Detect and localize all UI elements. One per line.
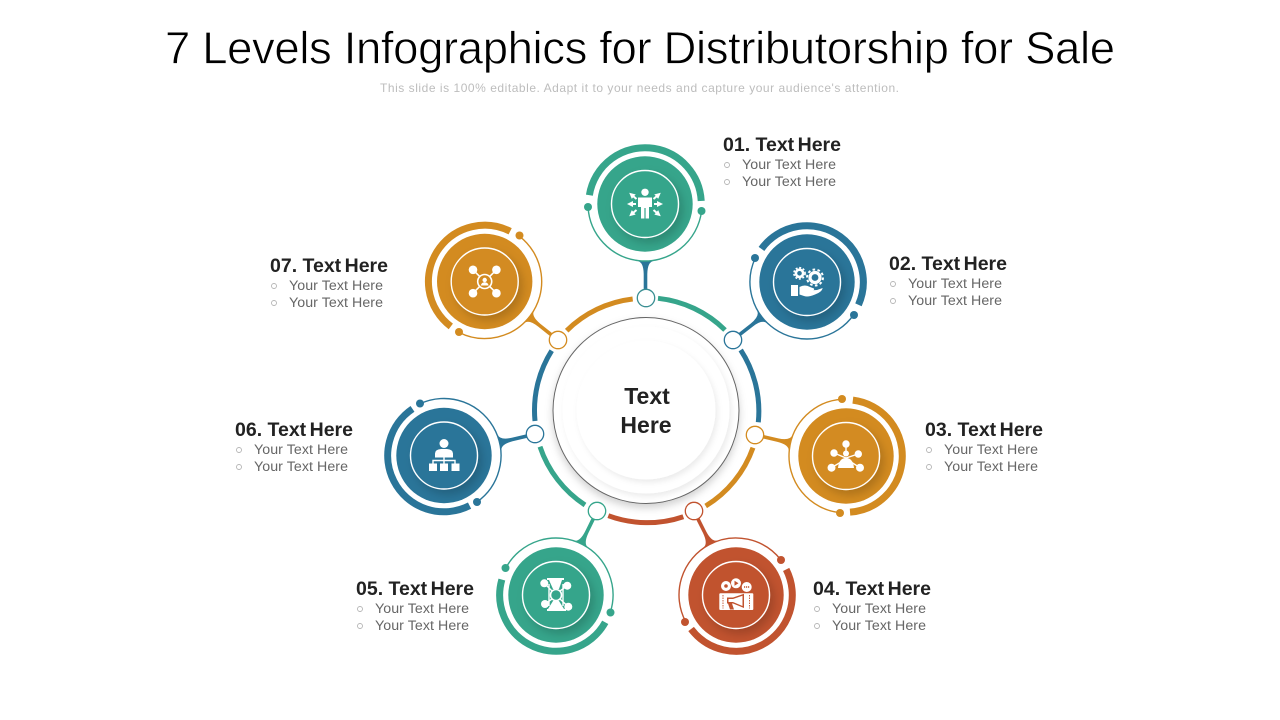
disk 04: [688, 547, 784, 643]
icon: hourglass network: [540, 578, 572, 611]
disk 07: [437, 234, 532, 329]
text block 07: 07. Text Here: [270, 255, 388, 277]
text block 07: Your Text Here: [289, 295, 383, 311]
node 04: [685, 502, 703, 520]
text block 03: Your Text Here: [944, 459, 1038, 475]
text block 07: [270, 255, 388, 311]
text block 01: 01. Text Here: [723, 134, 841, 156]
text block 02: [889, 253, 1007, 309]
disk 06: [396, 408, 492, 503]
text block 04: [813, 578, 931, 634]
node 07: [549, 331, 567, 349]
subtitle: This slide is 100% editable. Adapt it to your needs and capture your audience's attention.: [380, 81, 899, 95]
connector 03: [759, 428, 792, 451]
text block 06: 06. Text Here: [235, 419, 353, 441]
text block 02: Your Text Here: [908, 293, 1002, 309]
node 03: [746, 426, 764, 444]
connector 02: [733, 311, 767, 342]
text block 03: 03. Text Here: [925, 419, 1043, 441]
level 04 circle: [659, 502, 813, 672]
text block 04: Your Text Here: [832, 601, 926, 617]
center label: Text: [624, 383, 670, 409]
outer arcs 01: [581, 140, 709, 268]
icon: person network: [828, 440, 864, 472]
outer arcs 02: [728, 203, 886, 361]
text block 06: Your Text Here: [254, 459, 348, 475]
icon: hub network: [469, 266, 501, 298]
title: 7 Levels Infographics for Distributorship for Sale: [165, 22, 1115, 74]
level 03 circle: [746, 393, 909, 519]
text block 06: Your Text Here: [254, 442, 348, 458]
node 05: [588, 502, 606, 520]
text block 04: Your Text Here: [832, 618, 926, 634]
outer arcs 07: [405, 202, 565, 361]
level 02 circle: [724, 203, 886, 361]
level 05 circle: [479, 502, 633, 672]
text block 03: [925, 419, 1043, 475]
text block 05: [356, 578, 474, 634]
disk 03: [798, 408, 894, 504]
text block 01: Your Text Here: [742, 174, 836, 190]
outer arcs 06: [368, 380, 520, 531]
connector 06: [498, 428, 531, 450]
level 07 circle: [405, 202, 567, 361]
icon: person with arrows: [632, 189, 658, 218]
connector 05: [574, 514, 601, 548]
text block 01: Your Text Here: [742, 157, 836, 173]
text block 05: Your Text Here: [375, 601, 469, 617]
text block 05: 05. Text Here: [356, 578, 474, 600]
disk 01: [597, 156, 693, 252]
text block 02: 02. Text Here: [889, 253, 1007, 275]
text block 07: Your Text Here: [289, 278, 383, 294]
node 01: [637, 289, 655, 307]
connector 04: [690, 514, 718, 548]
text block 04: 04. Text Here: [813, 578, 931, 600]
outer arcs 04: [659, 518, 813, 672]
text block 05: Your Text Here: [375, 618, 469, 634]
node 02: [724, 331, 742, 349]
central circle: [553, 318, 739, 504]
outer arcs 03: [783, 393, 909, 519]
disk 05: [508, 547, 604, 643]
connector 07: [524, 311, 557, 342]
text block 06: [235, 419, 353, 475]
level 06 circle: [368, 380, 544, 531]
text block 03: Your Text Here: [944, 442, 1038, 458]
center label: Here: [620, 412, 672, 438]
icon: megaphone with media bubbles: [719, 578, 753, 610]
icon: gears on hand: [791, 268, 823, 296]
central ring of seven arc segments: [534, 298, 759, 523]
outer arcs 05: [479, 518, 633, 672]
node 06: [526, 425, 544, 443]
level 01 circle: [581, 140, 709, 307]
icon: org chart: [429, 439, 460, 471]
disk 02: [759, 234, 855, 330]
text block 02: Your Text Here: [908, 276, 1002, 292]
text block 01: [723, 134, 841, 190]
connector 01: [638, 261, 654, 291]
